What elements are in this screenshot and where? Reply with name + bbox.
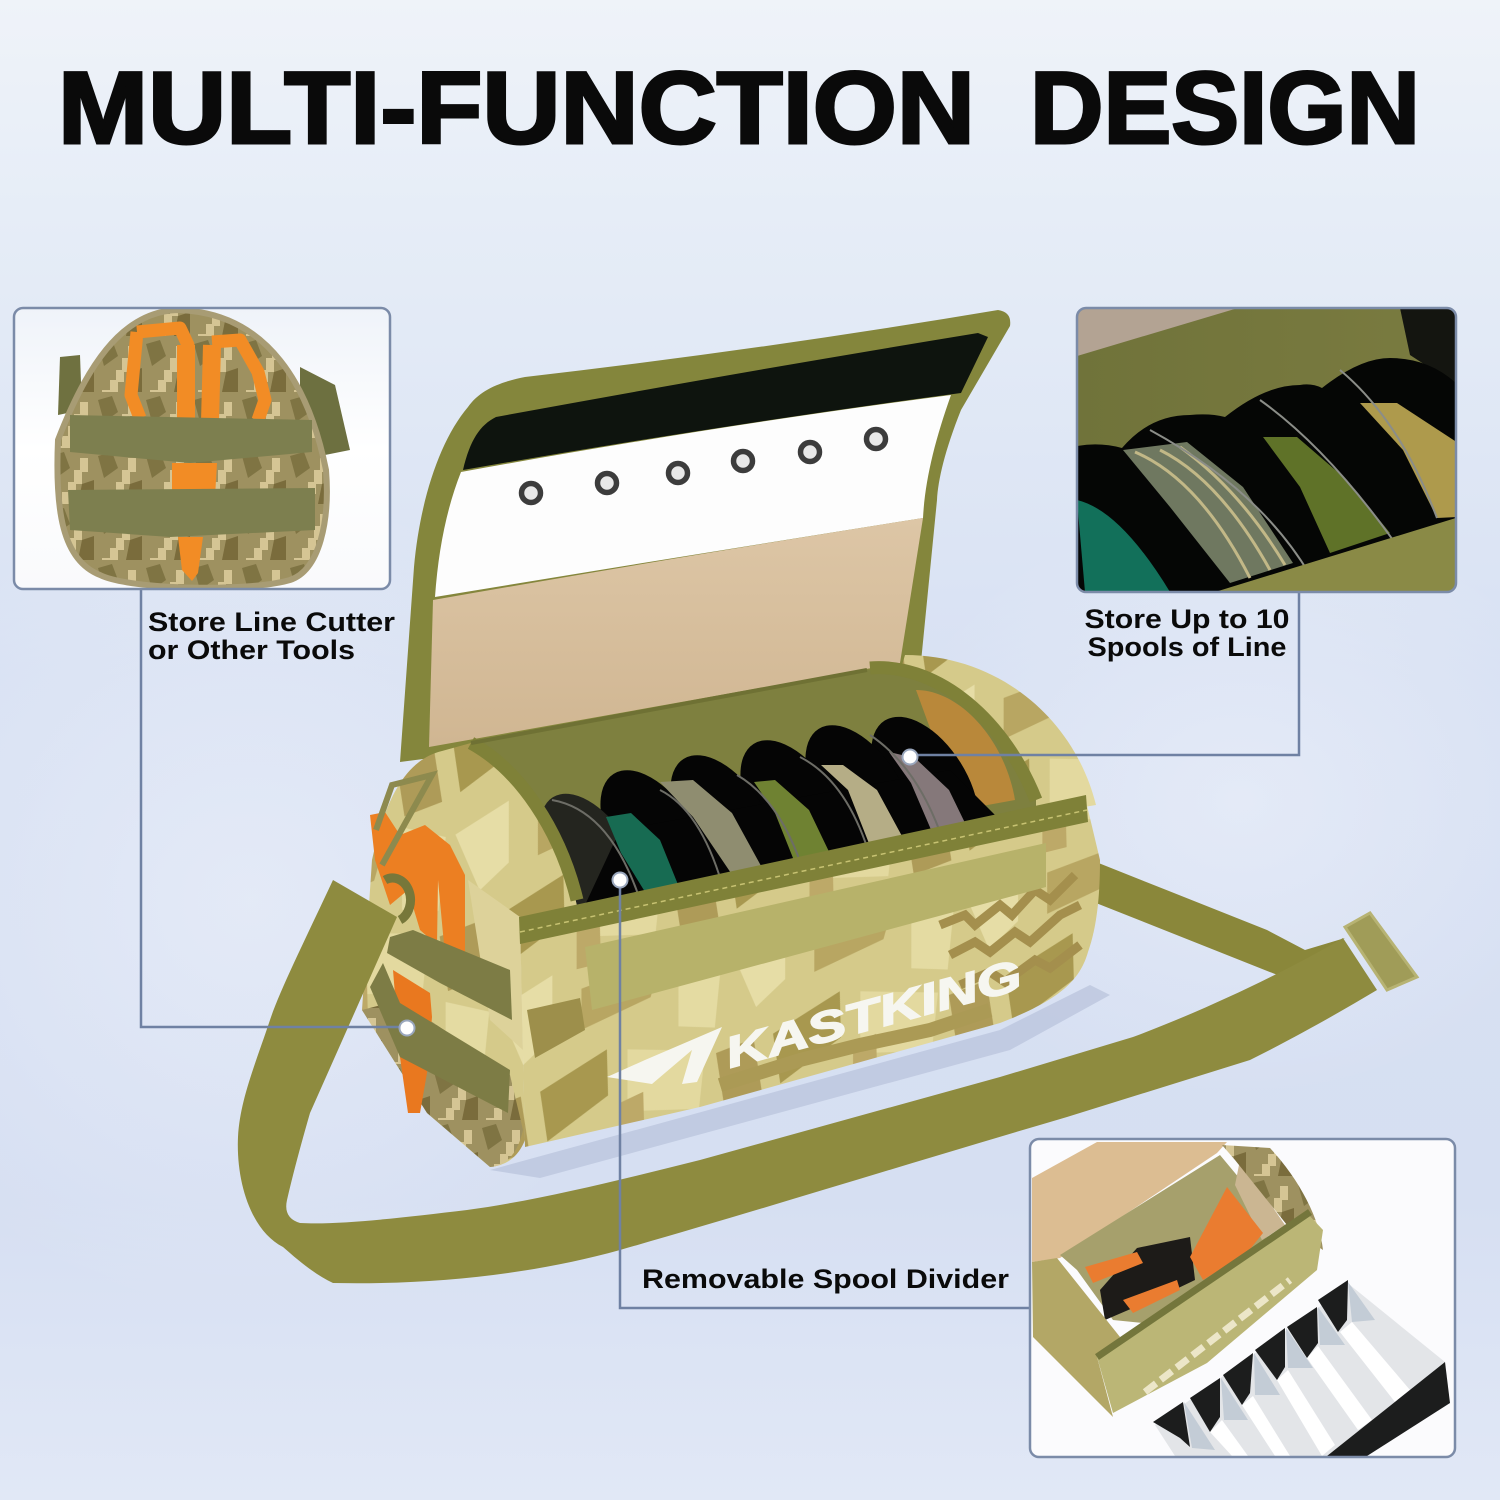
front body: [1097, 1213, 1323, 1413]
tray white strips: [1210, 1322, 1410, 1456]
lid black velcro strip: [463, 333, 988, 470]
callout leader lines: [141, 590, 1299, 1308]
bag interior with spools: [494, 677, 1036, 905]
right end cap: [1222, 1145, 1323, 1250]
panel: line cutter detail: [14, 308, 390, 589]
rim binding: [471, 668, 1036, 900]
webbing straps: [70, 415, 312, 463]
hem webbing: [1215, 518, 1456, 592]
carabiner clip: [376, 775, 432, 920]
main product: tackle bag: [238, 310, 1417, 1283]
label: store line cutter: or Other Tools: [148, 635, 355, 665]
scissor blade sheath: [172, 463, 217, 490]
divider mesh: [1184, 1282, 1375, 1450]
scissor handles: [131, 328, 265, 422]
black spool flanges: [1077, 358, 1458, 600]
back strap: [1096, 862, 1345, 978]
left end cap: [362, 743, 577, 1167]
orange line cutter on side: [370, 812, 465, 955]
teal line: [1077, 500, 1170, 592]
lower orange tool: [393, 970, 432, 1113]
sheath tip: [178, 537, 203, 581]
spool lines: [606, 813, 678, 890]
left end cap: [1032, 1258, 1120, 1417]
divider black panels: [1153, 1280, 1450, 1456]
camo line: [1123, 442, 1293, 583]
felt wall: [1344, 310, 1421, 370]
lid outer border: [400, 310, 1010, 762]
label: store line cutter: Store Line Cutter: [148, 607, 395, 637]
ground shadow: [490, 985, 1110, 1178]
label: store up to 10 spools: Spools of Line: [1088, 632, 1286, 662]
shoulder strap: [238, 880, 1377, 1283]
title: DESIGN: [1030, 51, 1420, 165]
lid: [400, 310, 1010, 762]
tan lid: [1032, 1142, 1227, 1262]
label: store up to 10 spools: [1084, 604, 1290, 662]
strap buckle: [1345, 913, 1417, 990]
label: store line cutter: [148, 607, 395, 665]
eyelets: [522, 430, 886, 502]
end cap shell: [57, 310, 327, 588]
side loops: [58, 355, 82, 415]
velcro patch: [585, 843, 1046, 1010]
green line: [1263, 437, 1390, 553]
spool discs: [544, 716, 995, 904]
yellow line: [1360, 403, 1458, 518]
spool rims: [552, 735, 940, 900]
side webbing straps: [370, 930, 512, 1113]
tan lid corner: [1077, 308, 1238, 356]
callout dots: [400, 750, 918, 1036]
front body panel: [520, 797, 1100, 1147]
title: MULTI-FUNCTION: [58, 51, 975, 165]
hem webbing: [519, 795, 1088, 944]
dark corner: [1400, 308, 1456, 385]
logo: KASTKING wordmark: KASTKING: [720, 951, 1027, 1078]
flange rims: [1150, 370, 1437, 575]
panel: spools detail: [1077, 308, 1458, 600]
tools in bag: [1085, 1187, 1263, 1320]
right end cap: [900, 655, 1096, 815]
zigzag pattern on body: [720, 875, 1080, 1085]
bag interior: [1060, 1155, 1280, 1323]
panel: divider detail: [1030, 1139, 1455, 1457]
title: [58, 51, 1420, 165]
lid white mesh: [435, 395, 951, 597]
label: removable spool divider: Removable Spool Divider: [642, 1264, 1009, 1294]
lid tan lining: [429, 518, 923, 747]
divider tray: [1155, 1285, 1445, 1456]
label: store up to 10 spools: Store Up to 10: [1084, 604, 1290, 634]
logo: KK mark: [607, 1027, 722, 1084]
